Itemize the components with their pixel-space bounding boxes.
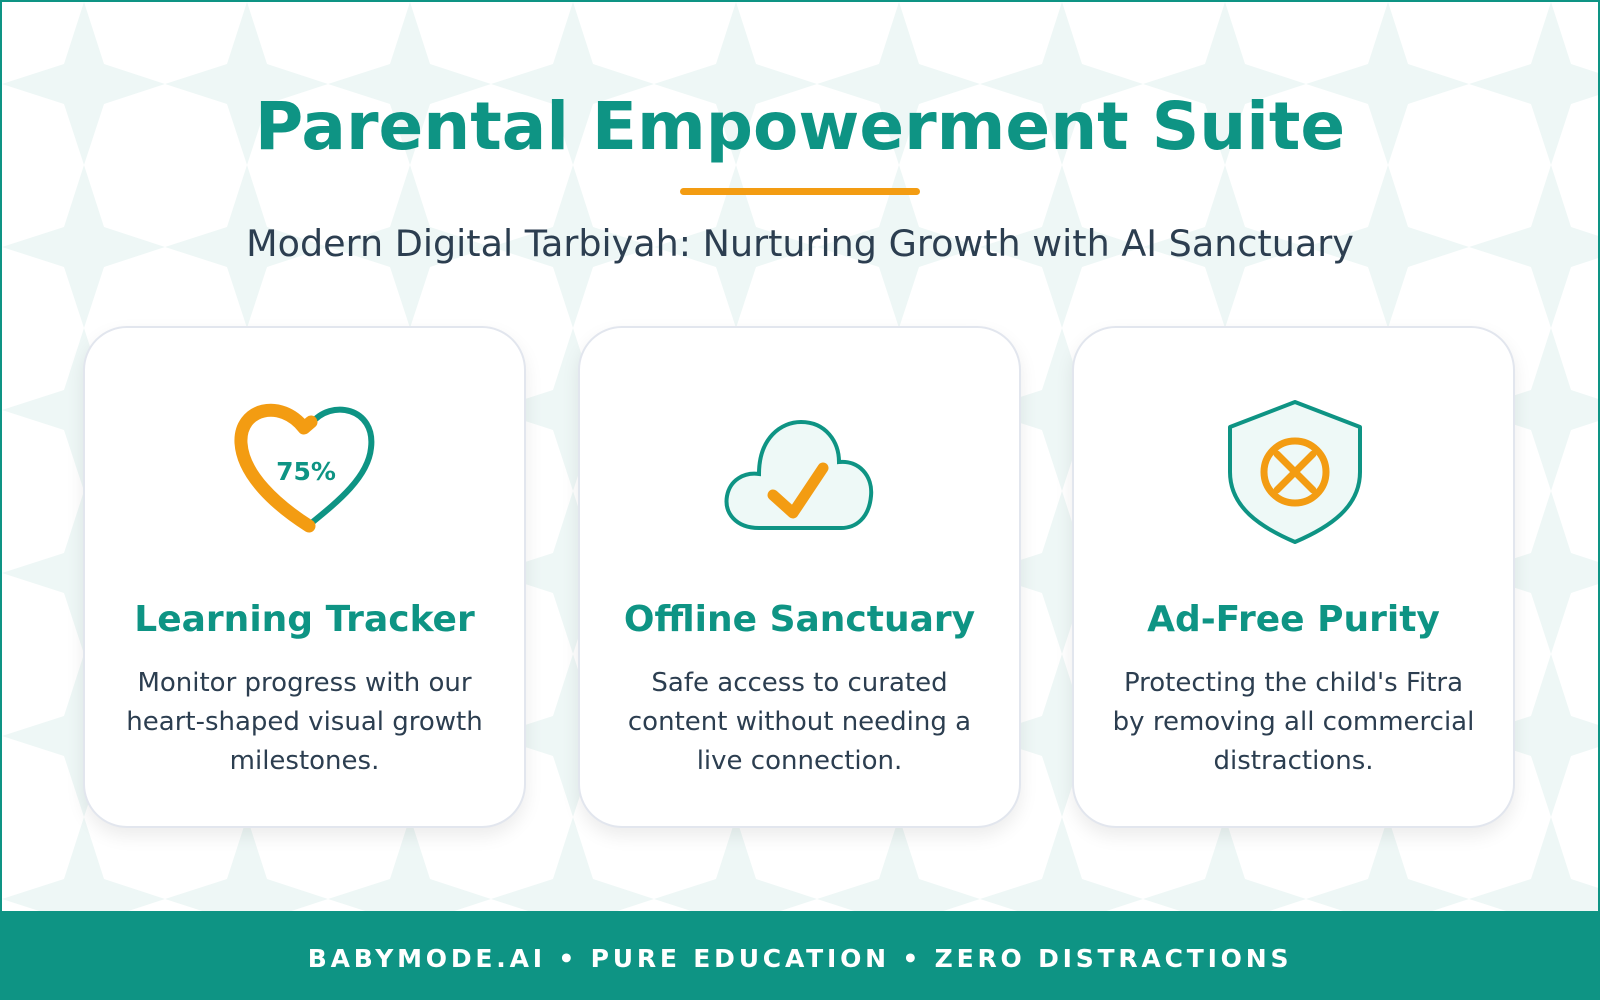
title underline [680, 188, 920, 195]
subtitle: Modern Digital Tarbiyah: Nurturing Growth with AI Sanctuary [246, 222, 1354, 265]
panel: learning tracker [83, 326, 526, 828]
title: Parental Empowerment Suite [255, 88, 1345, 165]
icon: heart progress: 75% [276, 457, 336, 486]
heading: Ad-Free Purity [1147, 599, 1440, 640]
heading: Offline Sanctuary [624, 599, 975, 640]
panel: ad-free purity [1072, 326, 1515, 828]
description: Protecting the child's Fitra by removing all commercial distractions. [1113, 668, 1474, 776]
description: Safe access to curated content without needing a live connection. [628, 668, 971, 776]
heading: Learning Tracker [134, 599, 475, 640]
footer: BABYMODE.AI • PURE EDUCATION • ZERO DISTRACTIONS [308, 944, 1292, 973]
footer [0, 911, 1600, 1000]
panel: offline sanctuary [578, 326, 1021, 828]
icon: cloud check [724, 420, 874, 530]
description: Monitor progress with our heart-shaped visual growth milestones. [126, 668, 483, 776]
icon: shield [1228, 400, 1362, 544]
icon: heart progress [234, 404, 374, 532]
